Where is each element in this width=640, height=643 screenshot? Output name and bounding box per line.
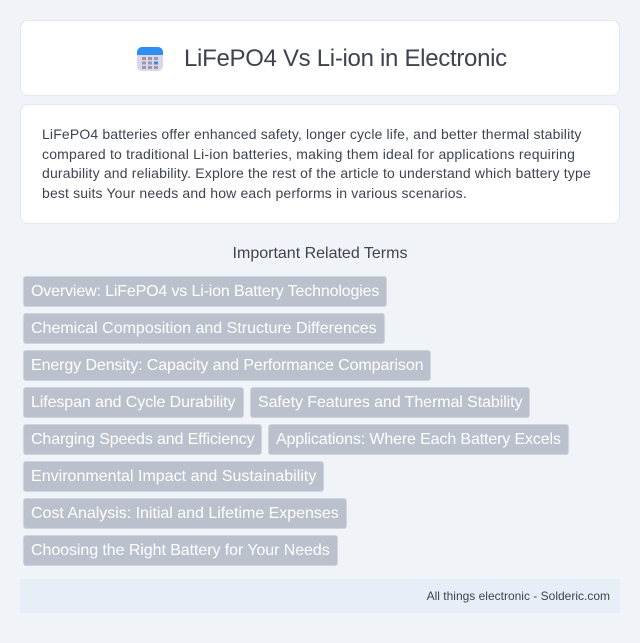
chip: lifespan: Lifespan and Cycle Durability <box>31 394 235 411</box>
intro text: LiFePO4 batteries offer enhanced safety, longer cycle life, and better thermal stability <box>42 126 582 142</box>
intro text: compared to traditional Li-ion batteries, making them ideal for applications requiring <box>42 146 575 162</box>
chip: chemical <box>23 313 385 344</box>
chip: charging: Charging Speeds and Efficiency <box>31 431 255 448</box>
chip: choosing <box>23 535 338 566</box>
intro text <box>42 126 591 201</box>
intro text: durability and reliability. Explore the rest of the article to understand which battery type <box>42 165 591 181</box>
intro text panel <box>20 104 620 224</box>
title: LiFePO4 Vs Li-ion in Electronic <box>184 45 507 72</box>
chip: charging <box>23 424 262 455</box>
chip: overview <box>23 276 387 307</box>
chip: safety <box>250 387 530 418</box>
chip: environment: Environmental Impact and Sustainability <box>31 468 316 485</box>
chip: cost: Cost Analysis: Initial and Lifetime Expenses <box>31 505 339 522</box>
footer <box>20 579 620 613</box>
chip: energy: Energy Density: Capacity and Performance Comparison <box>31 357 423 374</box>
footer text: All things electronic - Solderic.com <box>427 589 610 603</box>
chip: overview: Overview: LiFePO4 vs Li-ion Battery Technologies <box>31 283 379 300</box>
section heading: Important Related Terms <box>233 245 407 262</box>
chip: environment <box>23 461 324 492</box>
chip: lifespan <box>23 387 244 418</box>
chip: energy <box>23 350 431 381</box>
chip: safety: Safety Features and Thermal Stability <box>258 394 522 411</box>
chip: applications <box>268 424 569 455</box>
icon: calendar <box>137 47 163 71</box>
intro text: best suits Your needs and how each performs in various scenarios. <box>42 184 467 200</box>
chip list <box>23 276 569 566</box>
chip: applications: Applications: Where Each Battery Excels <box>276 431 561 448</box>
chip: cost <box>23 498 347 529</box>
chip: choosing: Choosing the Right Battery for Your Needs <box>31 542 330 559</box>
header panel <box>20 20 620 96</box>
chip: chemical: Chemical Composition and Structure Differences <box>31 320 377 337</box>
